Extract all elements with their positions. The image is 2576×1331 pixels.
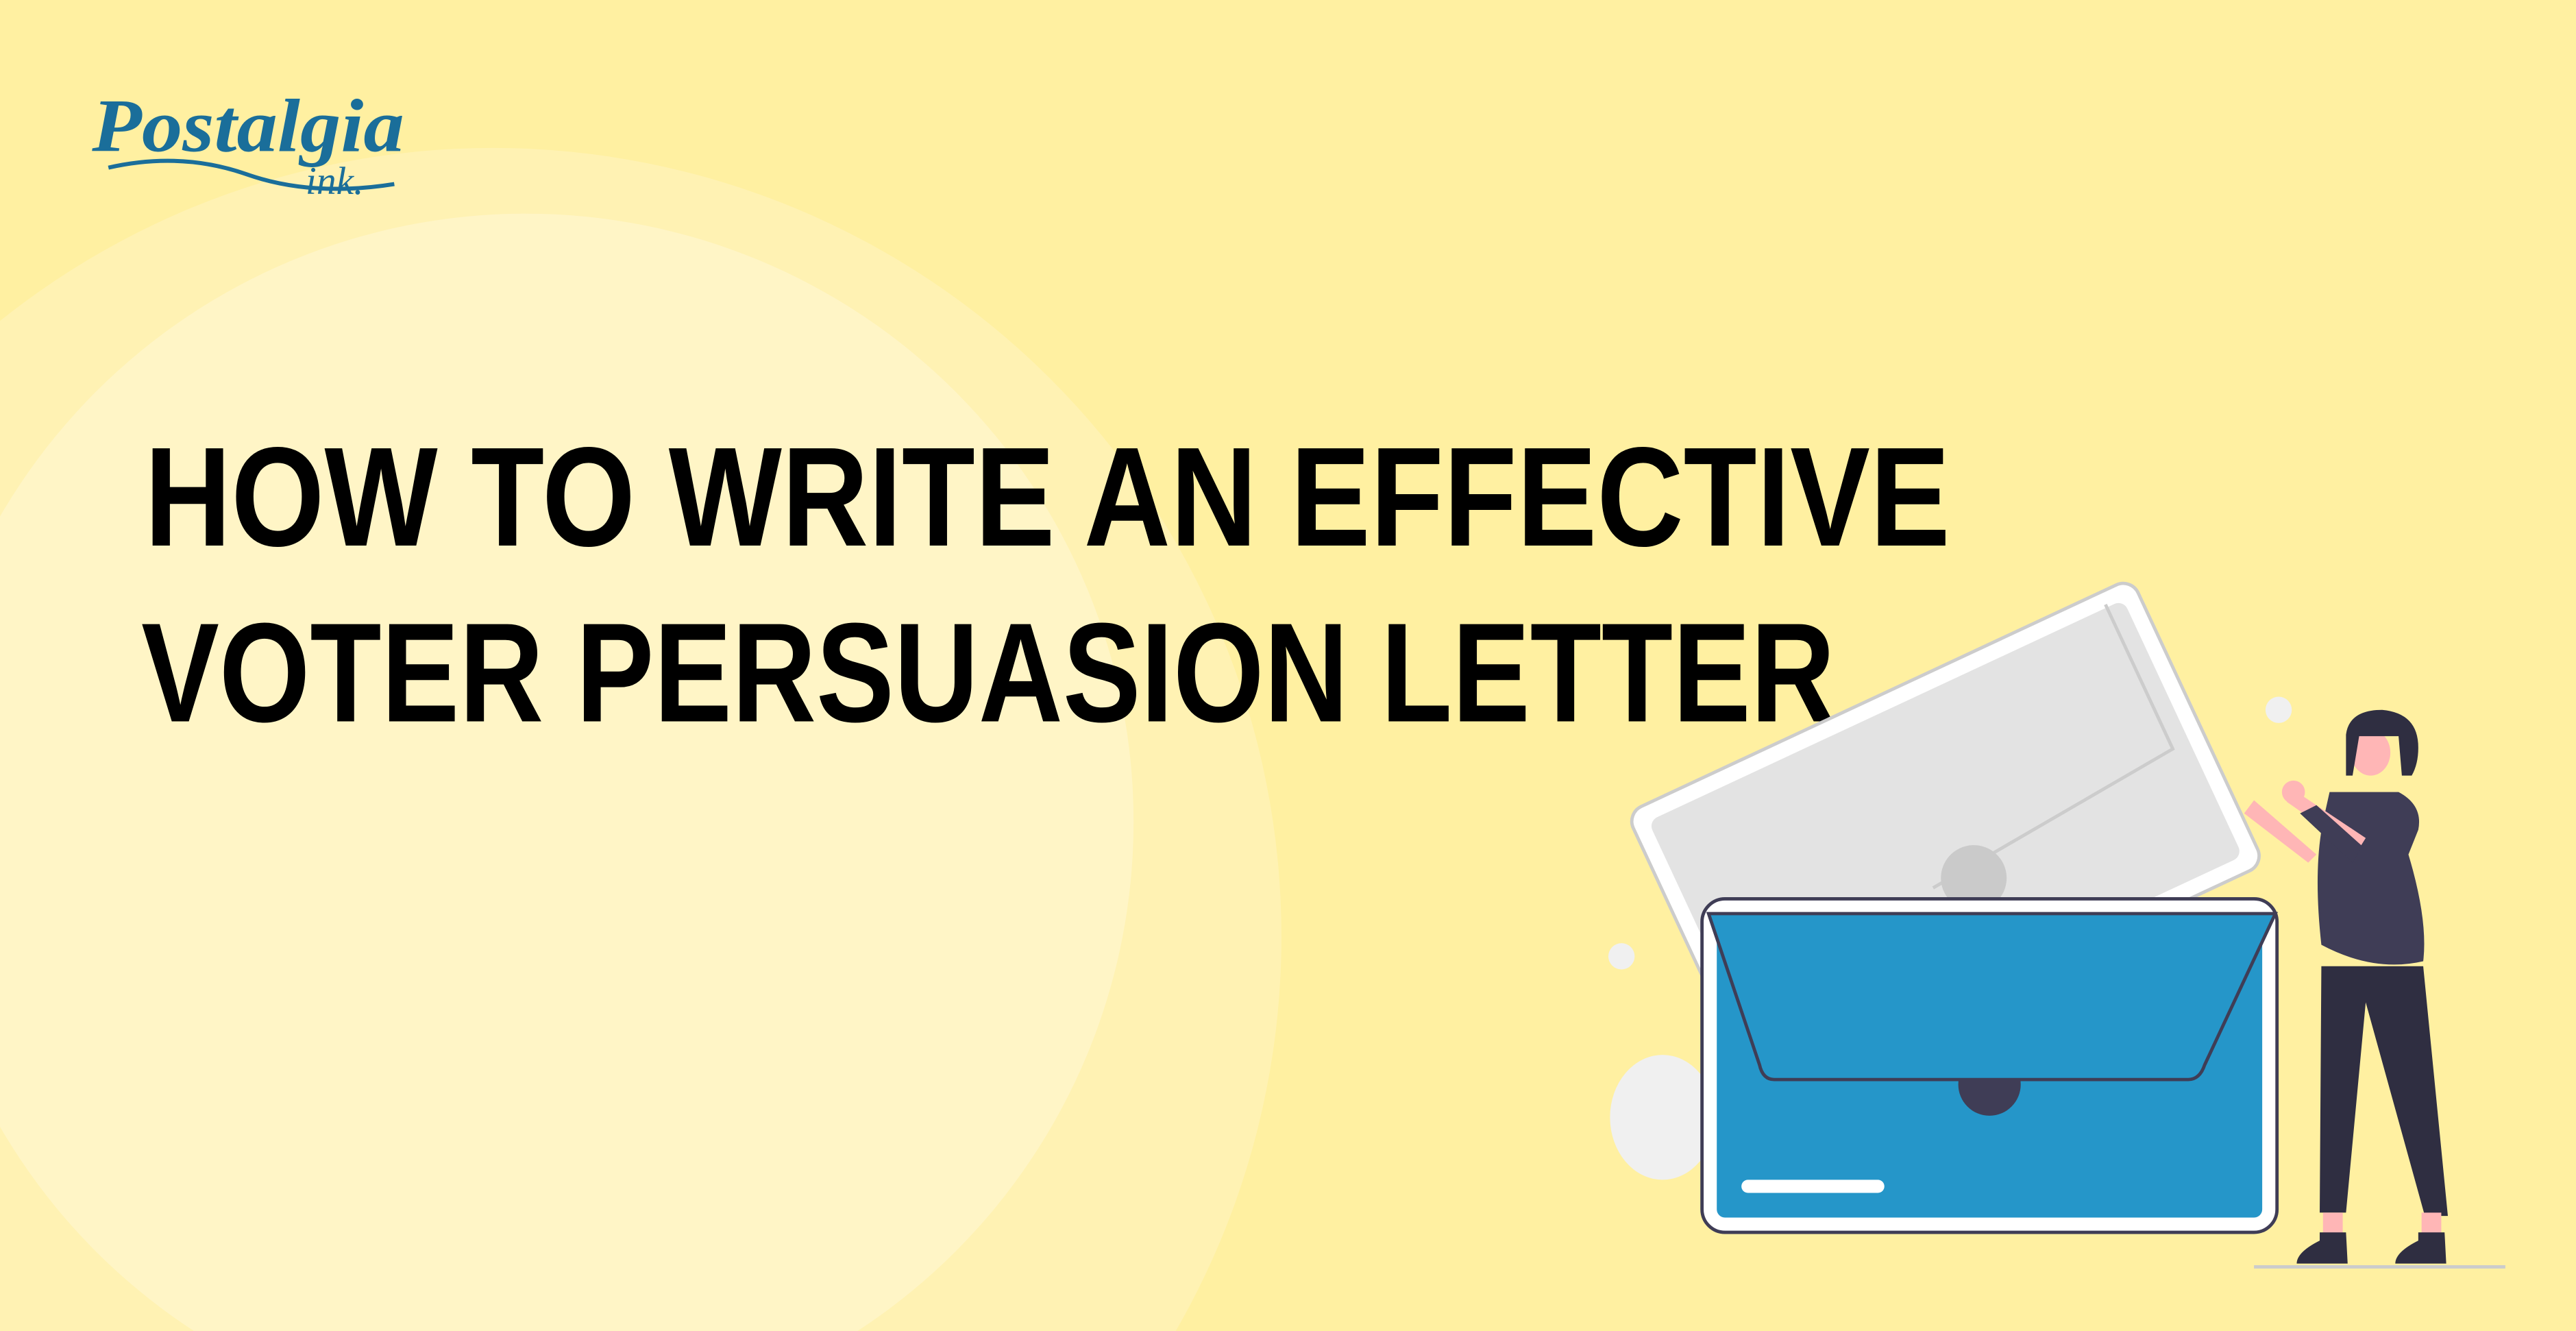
logo: ink. [306,160,364,203]
title [141,417,1950,752]
back envelope [1626,578,2264,1099]
title: VOTER PERSUASION LETTER [141,594,1835,752]
logo: Postalgia [91,84,404,168]
logo [91,84,404,203]
title: HOW TO WRITE AN EFFECTIVE [145,417,1950,576]
front envelope [1702,899,2277,1232]
person [2244,710,2505,1267]
decorative dots [1608,697,2292,1180]
